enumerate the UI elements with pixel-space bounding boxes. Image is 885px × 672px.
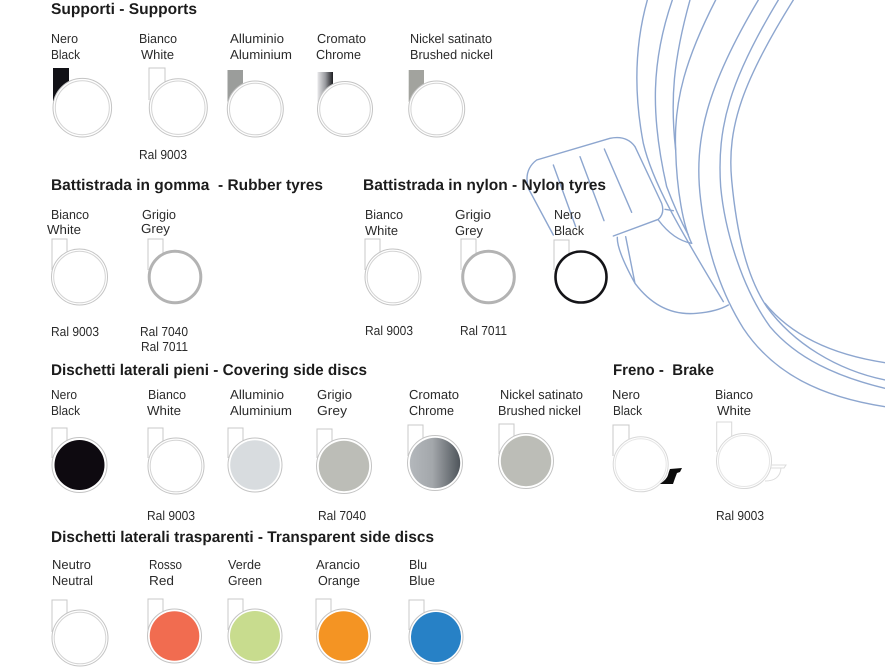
heading: transparent side discs: Dischetti laterali trasparenti - Transparent side discs bbox=[51, 529, 434, 546]
swatch: chrome support bbox=[316, 31, 372, 136]
swatch: grey rubber tyre: Grey bbox=[141, 221, 171, 236]
swatch: grey disc: Grey bbox=[317, 403, 348, 418]
swatch: white nylon tyre bbox=[365, 207, 421, 338]
heading: covering side discs: Dischetti laterali pieni - Covering side discs bbox=[51, 362, 367, 379]
swatch: red disc: Rosso bbox=[149, 557, 182, 572]
panel: rubber tyres bbox=[47, 177, 323, 354]
swatch: white support bbox=[139, 31, 207, 162]
swatch: orange disc bbox=[316, 557, 370, 663]
swatch: blue disc: Blue bbox=[409, 573, 435, 588]
swatch: chrome disc: Chrome bbox=[409, 403, 454, 418]
swatch: aluminium support: Aluminium bbox=[230, 47, 292, 62]
swatch: black support bbox=[51, 31, 112, 137]
swatch: white rubber tyre: Bianco bbox=[51, 207, 89, 222]
swatch: white brake: White bbox=[717, 403, 751, 418]
swatch: black support: Nero bbox=[51, 31, 78, 46]
swatch: white support: Ral 9003 bbox=[139, 147, 187, 162]
swatch: orange disc: Orange bbox=[318, 573, 360, 588]
swatch: white disc: Ral 9003 bbox=[147, 508, 195, 523]
swatch: grey rubber tyre bbox=[140, 207, 201, 354]
swatch: grey nylon tyre: Grey bbox=[455, 223, 483, 238]
swatch: grey disc: Grigio bbox=[317, 387, 352, 402]
swatch: neutral disc: Neutral bbox=[52, 573, 93, 588]
swatch: grey nylon tyre: Ral 7011 bbox=[460, 323, 507, 338]
swatch: black support: Black bbox=[51, 47, 80, 62]
swatch: brushed nickel disc: Brushed nickel bbox=[498, 403, 581, 418]
swatch: brushed nickel support: Nickel satinato bbox=[410, 31, 492, 46]
icon: white brake pedal bbox=[765, 465, 786, 481]
heading: supports: Supporti - Supports bbox=[51, 1, 197, 18]
panel: covering side discs bbox=[51, 362, 583, 523]
panel: nylon tyres bbox=[363, 177, 606, 338]
swatch: red disc bbox=[148, 557, 202, 663]
icon: black brake pedal bbox=[660, 468, 682, 484]
swatch: white nylon tyre: Bianco bbox=[365, 207, 403, 222]
swatch: white disc: White bbox=[147, 403, 181, 418]
swatch: chrome disc bbox=[408, 387, 462, 490]
swatch: black brake: Nero bbox=[612, 387, 640, 402]
swatch: black brake bbox=[612, 387, 682, 492]
swatch: brushed nickel disc: Nickel satinato bbox=[500, 387, 583, 402]
swatch: aluminium support bbox=[227, 31, 292, 137]
swatch: chrome disc: Cromato bbox=[409, 387, 459, 402]
swatch: white brake bbox=[715, 387, 786, 523]
swatch: green disc: Green bbox=[228, 573, 262, 588]
swatch: neutral disc bbox=[52, 557, 108, 666]
swatch: brushed nickel support: Brushed nickel bbox=[410, 47, 493, 62]
swatch: black brake: Black bbox=[613, 403, 642, 418]
swatch: black nylon tyre: Nero bbox=[554, 207, 581, 222]
swatch: black disc: Black bbox=[51, 403, 80, 418]
swatch: white brake: Bianco bbox=[715, 387, 753, 402]
swatch: aluminium disc: Aluminium bbox=[230, 403, 292, 418]
swatch: aluminium disc: Alluminio bbox=[230, 387, 284, 402]
swatch: chrome support: Cromato bbox=[317, 31, 366, 46]
swatch: green disc bbox=[228, 557, 282, 663]
swatch: brushed nickel support bbox=[409, 31, 493, 137]
swatch: white disc: Bianco bbox=[148, 387, 186, 402]
swatch: white support: White bbox=[141, 47, 174, 62]
swatch: blue disc bbox=[409, 557, 463, 664]
swatch: white support: Bianco bbox=[139, 31, 177, 46]
swatch: aluminium disc bbox=[228, 387, 292, 492]
swatch: grey nylon tyre bbox=[455, 207, 514, 338]
swatch: grey rubber tyre: Ral 7040 bbox=[140, 324, 188, 339]
swatch: orange disc: Arancio bbox=[316, 557, 360, 572]
panel: brake bbox=[612, 362, 786, 523]
swatch: white rubber tyre bbox=[47, 207, 108, 339]
swatch: grey disc: Ral 7040 bbox=[318, 508, 366, 523]
swatch: white rubber tyre: White bbox=[47, 222, 81, 237]
swatch: white rubber tyre: Ral 9003 bbox=[51, 324, 99, 339]
swatch: white nylon tyre: White bbox=[365, 223, 398, 238]
swatch: brushed nickel disc bbox=[498, 387, 583, 488]
swatch: red disc: Red bbox=[149, 573, 174, 588]
swatch: blue disc: Blu bbox=[409, 557, 427, 572]
heading: nylon tyres: Battistrada in nylon - Nylon tyres bbox=[363, 177, 606, 194]
swatch: black nylon tyre bbox=[554, 207, 606, 302]
swatch: white nylon tyre: Ral 9003 bbox=[365, 323, 413, 338]
swatch: grey nylon tyre: Grigio bbox=[455, 207, 491, 222]
swatch: grey rubber tyre: Grigio bbox=[142, 207, 176, 222]
swatch: black nylon tyre: Black bbox=[554, 223, 584, 238]
swatch: neutral disc: Neutro bbox=[52, 557, 91, 572]
swatch: grey rubber tyre: Ral 7011 bbox=[141, 339, 188, 354]
panel: supports bbox=[51, 1, 493, 162]
swatch: grey disc bbox=[316, 387, 372, 523]
swatch: chrome support: Chrome bbox=[316, 47, 361, 62]
panel: transparent side discs bbox=[51, 529, 463, 666]
swatch: black disc bbox=[51, 387, 107, 492]
heading: rubber tyres: Battistrada in gomma - Rubber tyres bbox=[51, 177, 323, 194]
swatch: white brake: Ral 9003 bbox=[716, 508, 764, 523]
swatch: white disc bbox=[147, 387, 204, 523]
swatch: green disc: Verde bbox=[228, 557, 261, 572]
swatch: black disc: Nero bbox=[51, 387, 77, 402]
swatch: aluminium support: Alluminio bbox=[230, 31, 284, 46]
illustration: blue caster outline bbox=[527, 0, 885, 407]
heading: brake: Freno - Brake bbox=[613, 362, 714, 379]
